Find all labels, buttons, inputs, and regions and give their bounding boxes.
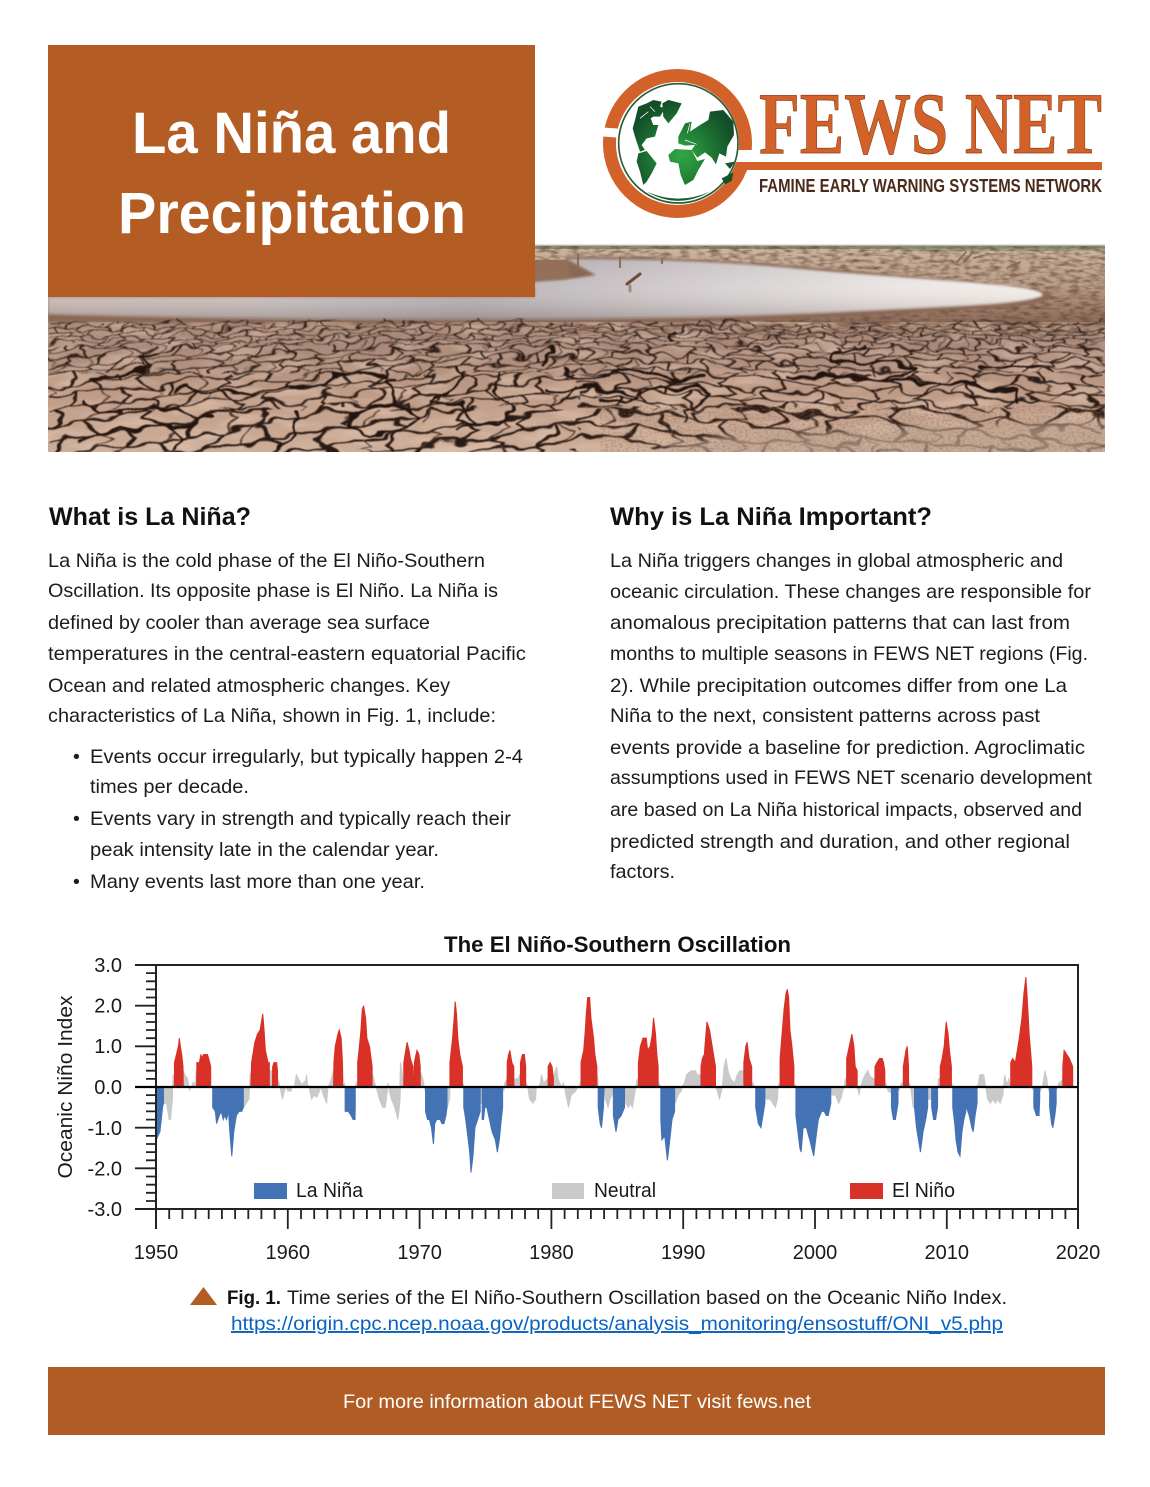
- bullet list: [73, 746, 523, 893]
- main cracks, left: [80, 352, 513, 450]
- right column: Why is La Niña Important?: [610, 503, 1093, 883]
- y axis labels: -3.0: [88, 1199, 122, 1221]
- drought photo: cracked earth and shrinking water: [48, 244, 1105, 456]
- legend: [254, 1180, 955, 1202]
- icon: caption triangle: [190, 1287, 217, 1305]
- caption text: Fig. 1.: [227, 1287, 281, 1309]
- bullet list: Many events last more than one year.: [90, 871, 425, 893]
- legend: El Niño: [892, 1180, 955, 1202]
- left column: What is La Niña?: [48, 503, 526, 893]
- chart title: The El Niño-Southern Oscillation: [444, 932, 791, 957]
- body paragraph: [48, 550, 526, 727]
- far bank: [535, 249, 1105, 325]
- title text: La Niña and: [132, 101, 451, 166]
- body paragraph: La Niña triggers changes in global atmospheric and: [610, 550, 1063, 572]
- y axis labels: 1.0: [94, 1036, 122, 1058]
- bullet list: Events vary in strength and typically reach their: [90, 808, 512, 830]
- body paragraph: assumptions used in FEWS NET scenario development: [610, 767, 1093, 789]
- body paragraph: predicted strength and duration, and other regional: [610, 831, 1070, 853]
- pale rough ground, lower right: [640, 420, 1105, 456]
- left inlet bank: [535, 260, 574, 283]
- body paragraph: are based on La Niña historical impacts, observed and: [610, 799, 1082, 821]
- y axis labels: -2.0: [88, 1158, 122, 1180]
- distant treeline: [535, 246, 1105, 249]
- shoreline shadow: [48, 257, 1053, 324]
- body paragraph: anomalous precipitation patterns that can last from: [610, 612, 1070, 634]
- logo globe: [619, 84, 738, 203]
- y axis title: Oceanic Niño Index: [55, 995, 77, 1178]
- x axis labels: 1970: [397, 1242, 442, 1264]
- body paragraph: defined by cooler than average sea surface: [48, 612, 430, 634]
- bullet list: •: [73, 808, 80, 830]
- FEWS NET logo: [598, 76, 1103, 212]
- y axis labels: 3.0: [94, 955, 122, 977]
- x axis labels: [134, 1242, 1100, 1264]
- body paragraph: [610, 550, 1093, 883]
- figure caption: [190, 1287, 1007, 1335]
- x axis labels: 1960: [266, 1242, 310, 1264]
- neutral bars: [163, 1059, 1063, 1120]
- y axis labels: 0.0: [94, 1077, 122, 1099]
- body paragraph: Ocean and related atmospheric changes. Key: [48, 675, 450, 697]
- caption link: https://origin.cpc.ncep.noaa.gov/products/analysis_monitoring/ensostuff/ONI_v5.php: [231, 1313, 1003, 1335]
- heading: Why is La Niña Important?: [610, 503, 932, 531]
- y axis labels: -1.0: [88, 1118, 122, 1140]
- y axis labels: [88, 955, 122, 1221]
- water: [48, 259, 1043, 319]
- logo ring: [598, 76, 1102, 212]
- footer banner: [48, 1367, 1105, 1435]
- body paragraph: factors.: [610, 861, 675, 883]
- x axis labels: 1950: [134, 1242, 178, 1264]
- bullet list: •: [73, 871, 80, 893]
- x axis labels: 2010: [925, 1242, 969, 1264]
- x axis labels: 2020: [1056, 1242, 1100, 1264]
- heading: What is La Niña?: [49, 503, 251, 531]
- title text: [118, 101, 466, 246]
- body paragraph: months to multiple seasons in FEWS NET regions (Fig.: [610, 643, 1088, 665]
- body paragraph: oceanic circulation. These changes are responsible for: [610, 581, 1092, 603]
- plot frame and zero line: [135, 965, 1078, 1229]
- legend: La Niña: [296, 1180, 364, 1202]
- body paragraph: 2). While precipitation outcomes differ from one La: [610, 675, 1067, 697]
- body paragraph: La Niña is the cold phase of the El Niño-Southern: [48, 550, 485, 572]
- title text: Precipitation: [118, 181, 466, 246]
- body paragraph: temperatures in the central-eastern equatorial Pacific: [48, 643, 526, 665]
- y axis labels: 2.0: [94, 996, 122, 1018]
- bullet list: •: [73, 746, 80, 768]
- x axis labels: 2000: [793, 1242, 837, 1264]
- legend: Neutral: [594, 1180, 656, 1202]
- bullet list: Events occur irregularly, but typically happen 2-4: [90, 746, 523, 768]
- x axis labels: 1980: [529, 1242, 574, 1264]
- chart: Oceanic Niño Index time series: [55, 932, 1100, 1264]
- caption description: Time series of the El Niño-Southern Oscillation based on the Oceanic Niño Index.: [287, 1287, 1007, 1309]
- body paragraph: characteristics of La Niña, shown in Fig. 1, include:: [48, 705, 496, 727]
- dead stakes in water: [578, 252, 1020, 291]
- main cracks, right: [540, 330, 1050, 423]
- body paragraph: Oscillation. Its opposite phase is El Niño. La Niña is: [48, 580, 498, 602]
- La Niña bars: [156, 1087, 1056, 1172]
- body paragraph: Niña to the next, consistent patterns across past: [610, 705, 1041, 727]
- water depth shading: [48, 282, 1042, 319]
- bullet list: peak intensity late in the calendar year.: [90, 839, 439, 861]
- footer text: For more information about FEWS NET visit fews.net: [343, 1391, 812, 1413]
- bullet list: times per decade.: [90, 776, 249, 798]
- cracked ground network: [48, 322, 1105, 454]
- El Niño bars: [174, 977, 1073, 1087]
- title panel: [48, 45, 535, 297]
- plate mottling: [48, 322, 1105, 452]
- x axis labels: 1990: [661, 1242, 705, 1264]
- body paragraph: events provide a baseline for prediction. Agroclimatic: [610, 737, 1085, 759]
